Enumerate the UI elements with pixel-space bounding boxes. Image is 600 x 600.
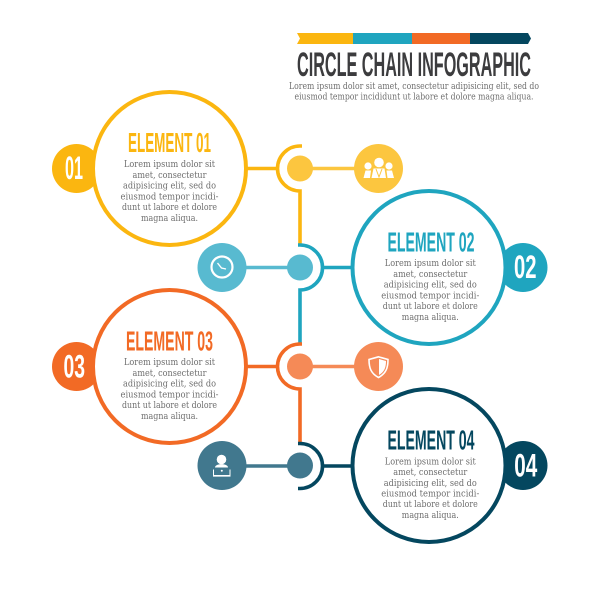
icon: people xyxy=(354,144,403,193)
text 04: Lorem ipsum dolor sit xyxy=(385,456,476,467)
badge 02 xyxy=(498,243,548,292)
text 03: adipisicing elit, sed do xyxy=(123,378,216,390)
text 01: amet, consectetur xyxy=(132,170,207,181)
text 02: adipisicing elit, sed do xyxy=(384,280,477,290)
subtitle xyxy=(289,81,539,102)
chain connector: element 03 xyxy=(246,344,355,443)
text 02: dunt ut labore et dolore xyxy=(383,301,478,312)
text 03: Lorem ipsum dolor sit xyxy=(124,357,215,368)
text 01: adipisicing elit, sed do xyxy=(123,180,216,192)
icon: clock xyxy=(198,243,246,292)
panel: element 03 xyxy=(52,290,246,443)
circle 01 xyxy=(93,92,246,245)
text 03: dunt ut labore et dolore xyxy=(122,400,217,411)
node: navy xyxy=(287,452,313,478)
badge 03: 03 xyxy=(63,348,85,384)
text 01: dunt ut labore et dolore xyxy=(122,202,217,213)
text 04: adipisicing elit, sed do xyxy=(384,478,477,489)
text 04: amet, consectetur xyxy=(393,467,468,478)
subtitle: Lorem ipsum dolor sit amet, consectetur adipisicing elit, sed do xyxy=(289,81,539,92)
chain connector: element 02 xyxy=(222,245,353,344)
text 02: magna aliqua. xyxy=(402,312,459,323)
header ribbon xyxy=(297,33,531,44)
text 03: magna aliqua. xyxy=(141,411,198,422)
panel: element 02 xyxy=(352,191,548,344)
circle 02 xyxy=(352,191,506,344)
text 02 xyxy=(381,258,479,323)
badge 01 xyxy=(52,144,101,193)
node: yellow xyxy=(287,156,313,182)
panel: element 04 xyxy=(352,389,548,542)
badge 04: 04 xyxy=(514,448,537,484)
heading 02: ELEMENT 02 xyxy=(388,226,474,258)
heading 03: ELEMENT 03 xyxy=(126,326,213,356)
badge 01: 01 xyxy=(65,150,83,186)
heading 04: ELEMENT 04 xyxy=(388,424,475,456)
chain connector: element 01 xyxy=(246,146,355,245)
icon: shield xyxy=(354,342,403,391)
text 02: amet, consectetur xyxy=(393,269,468,280)
node: teal xyxy=(287,254,313,280)
text 01: eiusmod tempor incidi- xyxy=(120,192,218,202)
text 04: eiusmod tempor incidi- xyxy=(381,488,479,500)
text 03 xyxy=(120,357,218,422)
text 04: dunt ut labore et dolore xyxy=(383,499,478,510)
text 02: eiusmod tempor incidi- xyxy=(381,290,479,302)
panel: element 01: ELEMENT 01 xyxy=(128,127,211,158)
text 02: Lorem ipsum dolor sit xyxy=(385,258,476,269)
text 01: Lorem ipsum dolor sit xyxy=(124,159,215,170)
badge 04 xyxy=(498,441,548,490)
circle 03 xyxy=(93,290,246,443)
node: orange xyxy=(287,354,313,380)
text 04: magna aliqua. xyxy=(402,510,459,521)
badge 02: 02 xyxy=(514,249,537,285)
badge 03 xyxy=(52,342,101,391)
text 04 xyxy=(381,456,479,521)
circle 04 xyxy=(352,389,506,542)
text 01: magna aliqua. xyxy=(141,213,198,224)
subtitle: eiusmod tempor incididunt ut labore et dolore magna aliqua. xyxy=(294,92,534,102)
icon: user at laptop xyxy=(198,441,246,490)
text 03: amet, consectetur xyxy=(132,368,207,379)
text 01 xyxy=(120,159,218,224)
panel: element 01 xyxy=(52,92,246,245)
text 03: eiusmod tempor incidi- xyxy=(120,390,218,400)
chain connector: element 04 xyxy=(222,444,353,488)
